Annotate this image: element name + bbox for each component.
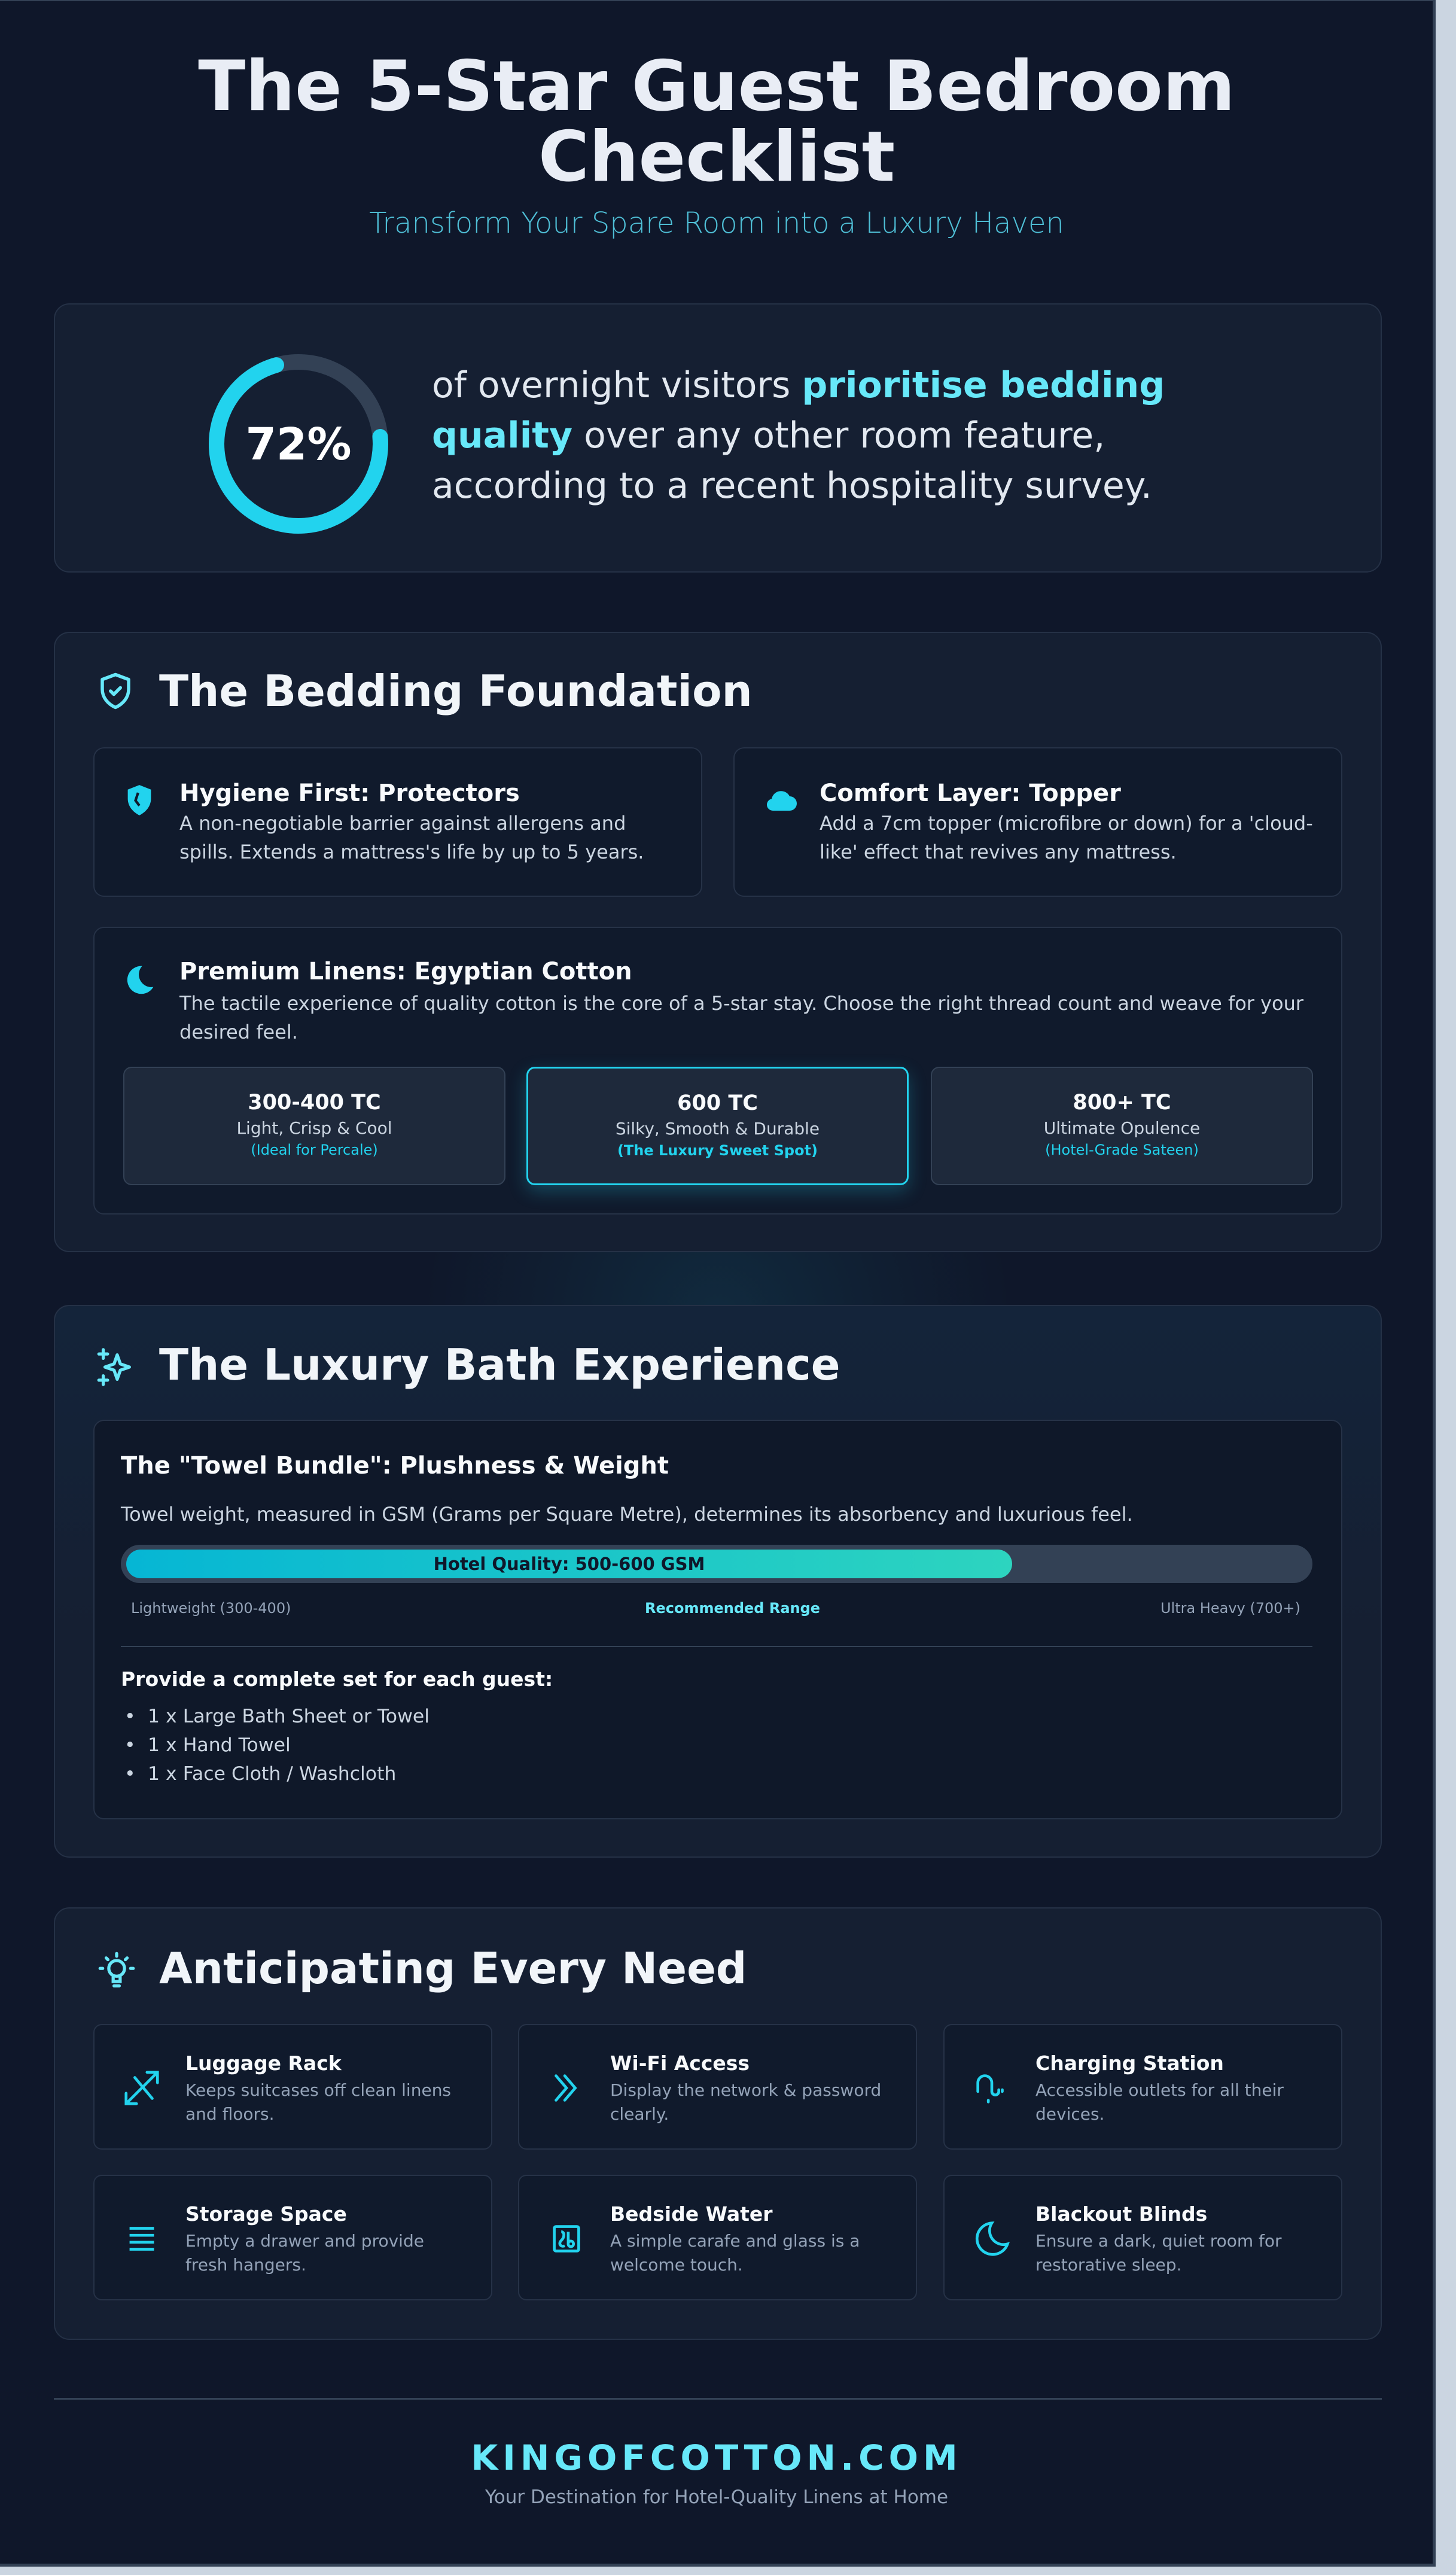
bar labels [131,1600,1300,1617]
panel: bedding foundation [54,632,1382,1252]
box: 300-400 TC [123,1067,505,1185]
checklist: • [124,1763,136,1785]
text: comfort: Comfort Layer: Topper [820,780,1121,807]
icon: cloud [767,791,797,811]
checklist: Provide a complete set for each guest: [121,1667,553,1691]
icon: lightbulb [98,1952,135,1987]
item: wifi [518,2024,917,2150]
item: luggage rack [93,2024,492,2150]
donut chart 72% [209,354,388,534]
box: 300-400 TC: 300-400 TC [248,1091,381,1115]
box: 600 TC: (The Luxury Sweet Spot) [617,1142,818,1159]
item: storage: Storage Space [185,2202,347,2226]
icon: sparkles [97,1348,131,1386]
item: blackout: Ensure a dark, quiet room for restorative sleep. [1035,2231,1282,2275]
text: Add a 7cm topper (microfibre or down) for a 'cloud-like' effect that revives any mattress. [820,812,1313,863]
item: water: A simple carafe and glass is a welcome touch. [610,2231,860,2275]
box: 300-400 TC: (Ideal for Percale) [251,1142,378,1158]
checklist: • [124,1734,136,1756]
heading: bath: The Luxury Bath Experience [159,1340,840,1390]
item: blackout: Blackout Blinds [1035,2202,1207,2226]
box: 300-400 TC: Light, Crisp & Cool [236,1118,392,1138]
text: hygiene: Hygiene First: Protectors [179,780,520,807]
heading: anticipating: Anticipating Every Need [159,1943,747,1993]
text: A non-negotiable barrier against allergens and spills. Extends a mattress's life by up to 5 years. [179,812,644,863]
towel desc: Towel weight, measured in GSM (Grams per Square Metre), determines its absorbency and luxurious feel. [121,1503,1133,1526]
icon: shield filled [128,785,151,815]
box: 800+ TC [931,1067,1313,1185]
item: charging: Charging Station [1035,2052,1224,2075]
bar chart: GSM: Hotel Quality: 500-600 GSM [434,1554,705,1574]
checklist: 1 x Large Bath Sheet or Towel [148,1706,430,1727]
checklist: 1 x Hand Towel [148,1734,291,1756]
title [198,46,1235,197]
item: wifi: Display the network & password clearly. [610,2080,881,2124]
panel: anticipating [54,1907,1382,2340]
box: 800+ TC: Ultimate Opulence [1044,1118,1200,1138]
subtitle: Transform Your Spare Room into a Luxury Haven [369,206,1064,240]
item: storage [93,2175,492,2300]
card: hygiene [93,747,702,897]
item: luggage rack: Keeps suitcases off clean linens and floors. [185,2080,451,2124]
item: blackout [943,2175,1342,2300]
towel title: The "Towel Bundle": Plushness & Weight [121,1452,669,1480]
title: The 5-Star Guest Bedroom [198,46,1235,127]
icon: moon [127,966,153,994]
box: 600 TC: Silky, Smooth & Durable [616,1119,820,1139]
box: 800+ TC: (Hotel-Grade Sateen) [1045,1142,1199,1158]
item: water [518,2175,917,2300]
heading: The Bedding Foundation: The Bedding Foundation [159,666,753,716]
bar labels: Recommended Range [645,1600,820,1617]
item: water: Bedside Water [610,2202,773,2226]
checklist [121,1667,553,1785]
item: storage: Empty a drawer and provide fresh hangers. [185,2231,424,2275]
footer brand: KINGOFCOTTON.COM [471,2437,962,2478]
icon: shield [100,672,130,710]
stat text: of overnight visitors prioritise bedding quality over any other room feature, according to a recent hospitality survey. [432,364,1165,507]
box: 600 TC: 600 TC [677,1091,758,1115]
panel: stat [54,303,1382,573]
text: premium: Premium Linens: Egyptian Cotton [179,958,632,985]
text: The tactile experience of quality cotton is the core of a 5-star stay. Choose the right thread count and weave for your desired feel. [179,992,1303,1043]
checklist: 1 x Face Cloth / Washcloth [148,1763,396,1785]
box: 800+ TC: 800+ TC [1073,1091,1171,1115]
item: charging [943,2024,1342,2150]
item: luggage rack: Luggage Rack [185,2052,342,2075]
checklist: • [124,1706,136,1727]
card: premium linens [93,927,1342,1215]
footer tagline: Your Destination for Hotel-Quality Linens at Home [485,2486,948,2508]
panel: bath [54,1305,1382,1858]
item: charging: Accessible outlets for all their devices. [1035,2080,1284,2124]
bar labels: Lightweight (300-400) [131,1600,291,1617]
title: Checklist [538,117,895,197]
bar labels: Ultra Heavy (700+) [1160,1600,1300,1617]
item: wifi: Wi-Fi Access [610,2052,750,2075]
card: comfort [733,747,1342,897]
box: 600 TC [526,1067,909,1185]
bar chart: GSM [121,1545,1312,1583]
donut chart 72%: 72% [245,419,352,470]
card: towel bundle [93,1420,1342,1819]
